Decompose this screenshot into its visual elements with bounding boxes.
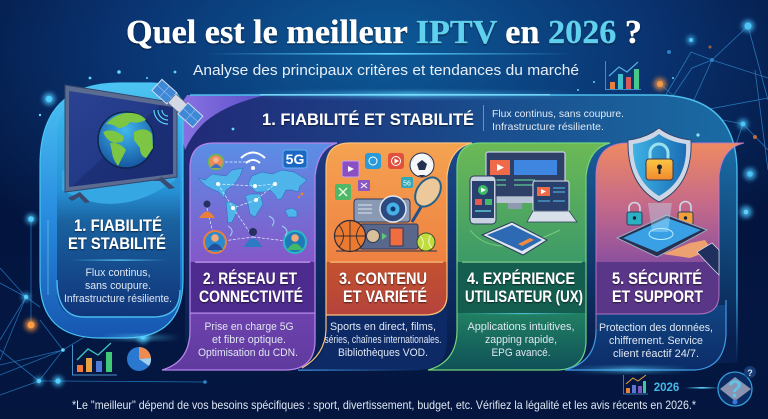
panel: card 2 réseau [160, 143, 340, 370]
panel: card 1 fiabilité [40, 79, 203, 339]
card 5 title line 2: ET SUPPORT [612, 288, 703, 306]
card 1 text [64, 267, 172, 305]
icon: tablet in hand [617, 203, 719, 275]
card 5 text: chiffrement. Service [609, 335, 703, 347]
panel: card 4 expérience [425, 143, 615, 370]
connector line [685, 387, 719, 389]
icon: tv with globe [65, 85, 177, 203]
icon: shield with lock [628, 128, 691, 202]
icon: bottom-left trend chart [72, 343, 117, 375]
icon: users [199, 154, 306, 253]
card 3 text: Bibliothèques VOD. [338, 347, 428, 359]
icon: phone [470, 176, 496, 224]
card 2 text: et fibre optique. [212, 334, 286, 346]
card 5 lower section [565, 305, 726, 370]
network: left side [0, 70, 207, 395]
card 4 text [468, 321, 574, 359]
card 3 lower section [298, 310, 447, 370]
card 5 text [599, 322, 713, 360]
card 3 text: Sports en direct, films, [330, 321, 436, 333]
icon: pie chart [127, 347, 151, 371]
icon: small locks [627, 202, 693, 225]
network: right side [577, 20, 768, 218]
icon: 5G badge: 5G [286, 151, 304, 167]
icon: projector [336, 196, 437, 251]
icon: question badge: ? [728, 376, 742, 403]
card 4 text: zapping rapide, [485, 334, 557, 346]
card 5 text: client réactif 24/7. [613, 348, 699, 360]
icon: tablet [470, 222, 560, 255]
icon: small 2026 chart [624, 375, 648, 394]
panel heading description [483, 105, 624, 133]
card 1 text: sans coupure. [85, 280, 151, 292]
panel: card 5 sécurité [565, 128, 746, 372]
card 2 text: Prise en charge 5G [204, 321, 294, 333]
purple wedge [176, 95, 266, 150]
icon: app tiles: 56 [403, 180, 411, 188]
icon: app tiles [335, 153, 413, 200]
card 5 title: 5. SÉCURITÉ [612, 269, 702, 288]
card 4 title line 2: UTILISATEUR (UX) [465, 288, 583, 306]
card 2 text: Optimisation du CDN. [198, 347, 298, 359]
footnote: *Le "meilleur" dépend de vos besoins spécifiques : sport, divertissement, budget, etc. Vérifiez la légalité et les avis récents en 2026.* [72, 398, 696, 412]
icon: tennis racket [410, 173, 446, 222]
icon: soccer ball [410, 153, 434, 177]
card 1 text: Flux continus, [86, 267, 150, 279]
icon: question badge: ? [747, 368, 753, 378]
card 1 title line 2: ET STABILITÉ [68, 234, 166, 253]
subtitle: Analyse des principaux critères et tendances du marché [193, 62, 579, 79]
panel heading description: Infrastructure résiliente. [492, 121, 604, 133]
icon: question badge [718, 366, 756, 406]
icon: header trend chart [606, 61, 641, 90]
card 2 text [198, 321, 298, 359]
panel heading: 1. FIABILITÉ ET STABILITÉ [262, 110, 474, 129]
card 2 title: 2. RÉSEAU ET [203, 269, 297, 288]
title underline [205, 53, 573, 55]
card 4 title: 4. EXPÉRIENCE [467, 269, 575, 288]
card 1 text: Infrastructure résiliente. [64, 293, 172, 305]
card 3 title: 3. CONTENU [339, 270, 427, 288]
card 3 text: séries, chaînes internationales. [324, 334, 442, 346]
card 5 text: Protection des données, [599, 322, 713, 334]
card 3 text [324, 321, 442, 359]
icon: satellite [152, 79, 203, 127]
card 3 title line 2: ET VARIÉTÉ [343, 287, 427, 306]
icon: wifi [241, 152, 265, 170]
card 4 text: Applications intuitives, [468, 321, 574, 333]
icon: tennis ball [417, 233, 435, 251]
panel heading description: Flux continus, sans coupure. [492, 108, 624, 120]
card 4 text: EPG avancé. [492, 347, 550, 359]
icon: monitor [486, 152, 565, 209]
icon: 5G badge [283, 150, 307, 168]
label: 2026: 2026 [654, 382, 679, 394]
icon: laptop [527, 181, 577, 222]
title: Quel est le meilleur IPTV en 2026 ? [126, 14, 642, 51]
panel: back panel with heading [176, 92, 737, 370]
icon: world map [198, 162, 307, 242]
panel: card 3 contenu [298, 143, 476, 371]
card 2 title line 2: CONNECTIVITÉ [199, 287, 303, 306]
icon: basketball [334, 220, 366, 252]
card 1 title: 1. FIABILITÉ [74, 216, 162, 235]
